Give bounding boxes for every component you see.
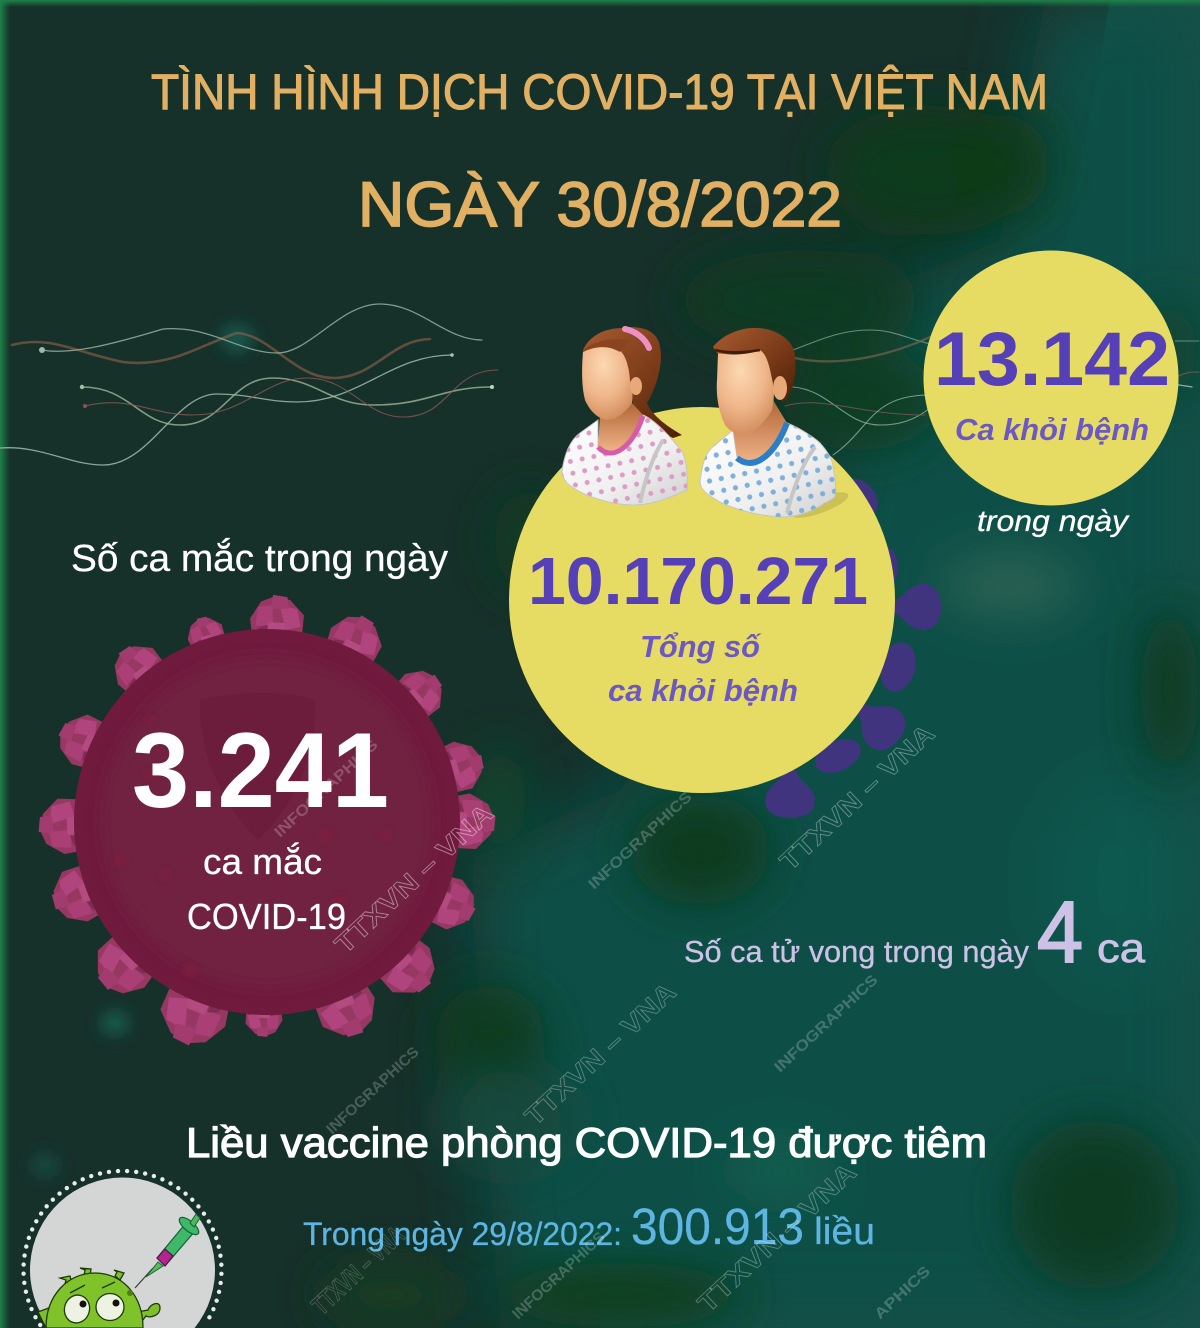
vaccine daily doses: Trong ngày 29/8/2022:: [303, 1216, 622, 1252]
watermarks: TTXVN – VNA: [306, 1220, 410, 1320]
daily recovered label: Ca khỏi bệnh: [955, 412, 1149, 447]
total recovered label: ca khỏi bệnh: [608, 673, 798, 708]
daily cases label: COVID-19: [187, 896, 346, 937]
daily cases number: 3.241: [132, 710, 389, 830]
icon: male patient: [700, 328, 851, 523]
deaths line: ca: [1097, 925, 1145, 971]
watermarks: TTXVN – VNA: [519, 976, 682, 1131]
watermarks: APHICS: [871, 1263, 934, 1323]
watermarks: [271, 718, 941, 1323]
recovered total circle: [509, 407, 895, 793]
vaccine daily doses: 300.913: [631, 1198, 804, 1255]
total recovered label: Tổng số: [640, 629, 762, 664]
watermarks: TTXVN – VNA: [329, 797, 499, 959]
date heading: NGÀY 30/8/2022: [358, 170, 842, 240]
red virus panel: [38, 594, 495, 1055]
total recovered number: 10.170.271: [528, 544, 868, 619]
title: TÌNH HÌNH DỊCH COVID-19 TẠI VIỆT NAM: [151, 64, 1048, 120]
total recovered label: [608, 629, 798, 708]
in the day label: trong ngày: [977, 505, 1130, 538]
watermarks: INFOGRAPHICS: [323, 1044, 422, 1138]
vaccine daily doses: liều: [814, 1211, 875, 1253]
vaccine heading: Liều vaccine phòng COVID-19 được tiêm: [186, 1119, 987, 1166]
watermarks: INFOGRAPHICS: [585, 788, 695, 893]
watermarks: TTXVN – VNA: [774, 718, 941, 876]
daily recovered circle: [924, 250, 1178, 506]
daily recovered number: 13.142: [934, 317, 1170, 402]
deaths line: Số ca tử vong trong ngày: [684, 934, 1029, 969]
daily cases label: [187, 841, 346, 937]
watermarks: INFOGRAPHICS: [271, 736, 381, 841]
decorative strands: left: [0, 304, 498, 465]
icon: vaccine syringe and virus badge: [24, 1171, 222, 1328]
daily cases heading: Số ca mắc trong ngày: [71, 537, 448, 580]
purple virus behind recovered circle: [765, 473, 941, 818]
deaths line: 4: [1037, 884, 1083, 981]
watermarks: TTXVN – VNA: [692, 1156, 862, 1318]
daily cases label: ca mắc: [203, 841, 322, 882]
icon: female patient: [562, 327, 687, 505]
vaccine daily doses: [303, 1198, 875, 1255]
decorative strands: right: [785, 330, 1199, 455]
watermarks: INFOGRAPHICS: [509, 1229, 608, 1323]
watermarks: INFOGRAPHICS: [771, 971, 881, 1076]
deaths line: [684, 884, 1145, 981]
